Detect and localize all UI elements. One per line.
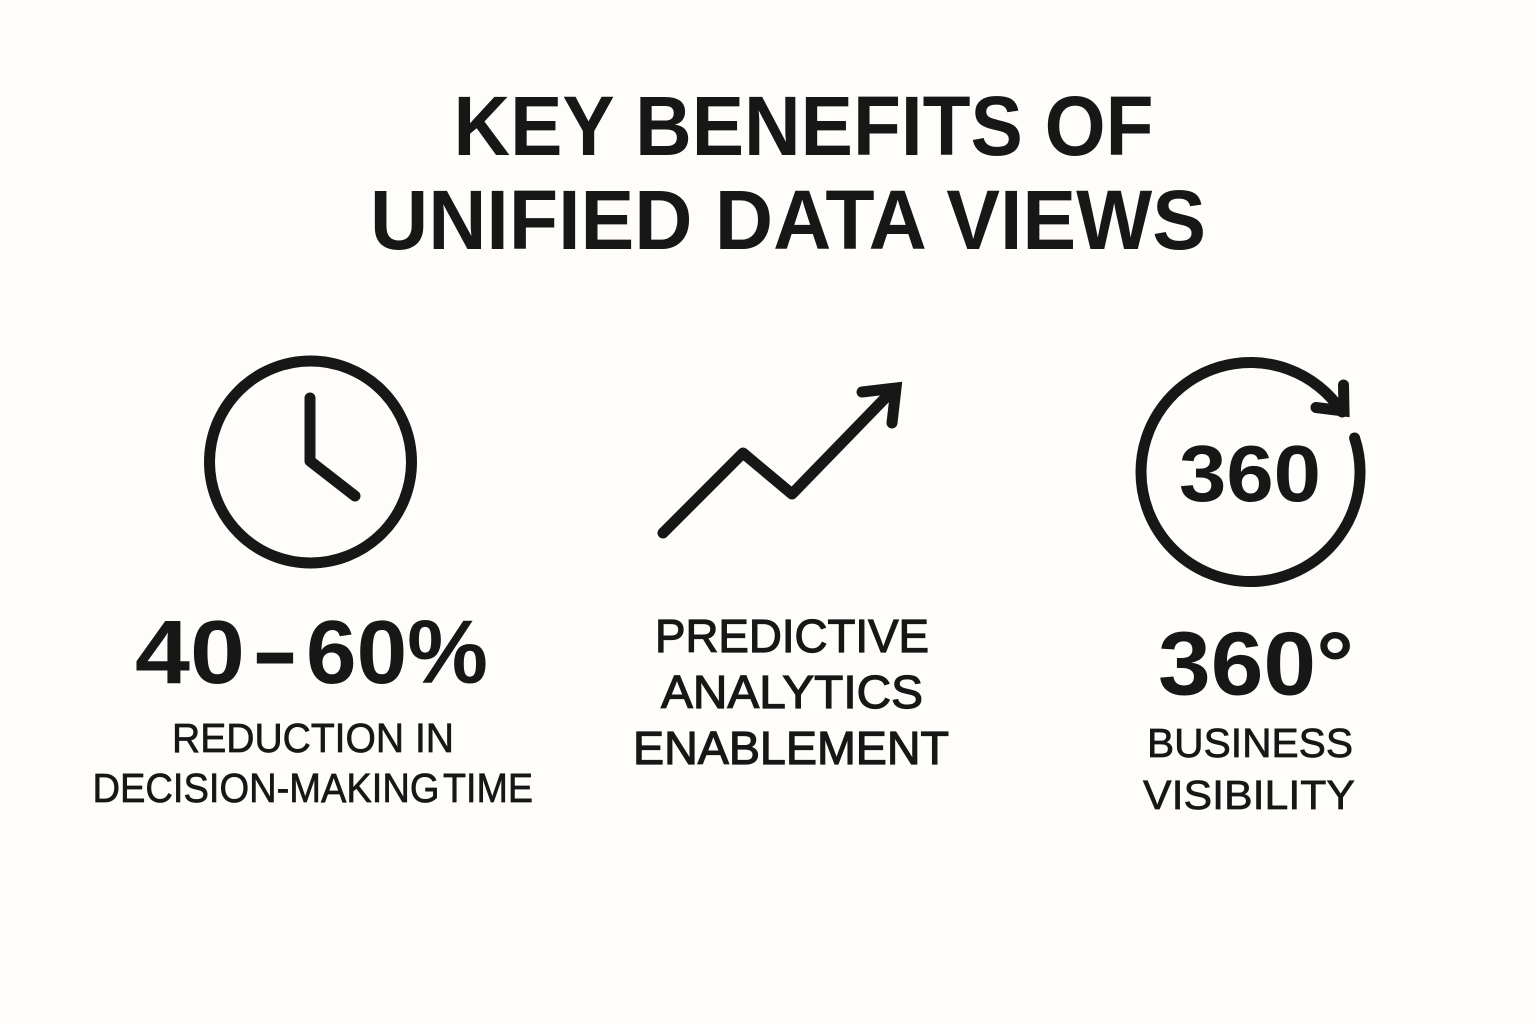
label: reduction in decision-making time: REDUCTION IN [172,715,454,761]
stat: 360 degrees: 360° [1158,614,1354,714]
label: reduction in decision-making time: TIME [443,765,533,811]
label: reduction in decision-making time: DECISION-MAKING [92,765,440,811]
title: KEY BENEFITS OF [454,79,1154,173]
panel: 360 visibility [1141,362,1360,818]
label: business visibility: VISIBILITY [1143,772,1355,818]
label: reduction in decision-making time [92,715,533,811]
stat: 40-60%: 60% [306,603,488,703]
label: business visibility: BUSINESS [1147,720,1353,766]
stat: 40-60%: – [256,602,294,702]
icon: 360 circular arrow [1141,362,1360,582]
icon: trend arrow [663,388,896,533]
stat: 40-60% [135,602,488,703]
panel: decision time [92,361,533,811]
panel: predictive analytics [633,388,949,774]
icon: clock [210,361,412,563]
title: UNIFIED DATA VIEWS [370,173,1206,267]
label: business visibility [1143,720,1355,818]
label: predictive analytics enablement [633,610,949,774]
stat: 40-60%: 40 [135,603,245,703]
icon: 360 circular arrow: 360 [1179,429,1321,518]
label: predictive analytics enablement: PREDICTIVE [655,610,929,662]
label: predictive analytics enablement: ANALYTICS [661,666,923,718]
title [370,79,1206,267]
label: predictive analytics enablement: ENABLEMENT [633,722,949,774]
